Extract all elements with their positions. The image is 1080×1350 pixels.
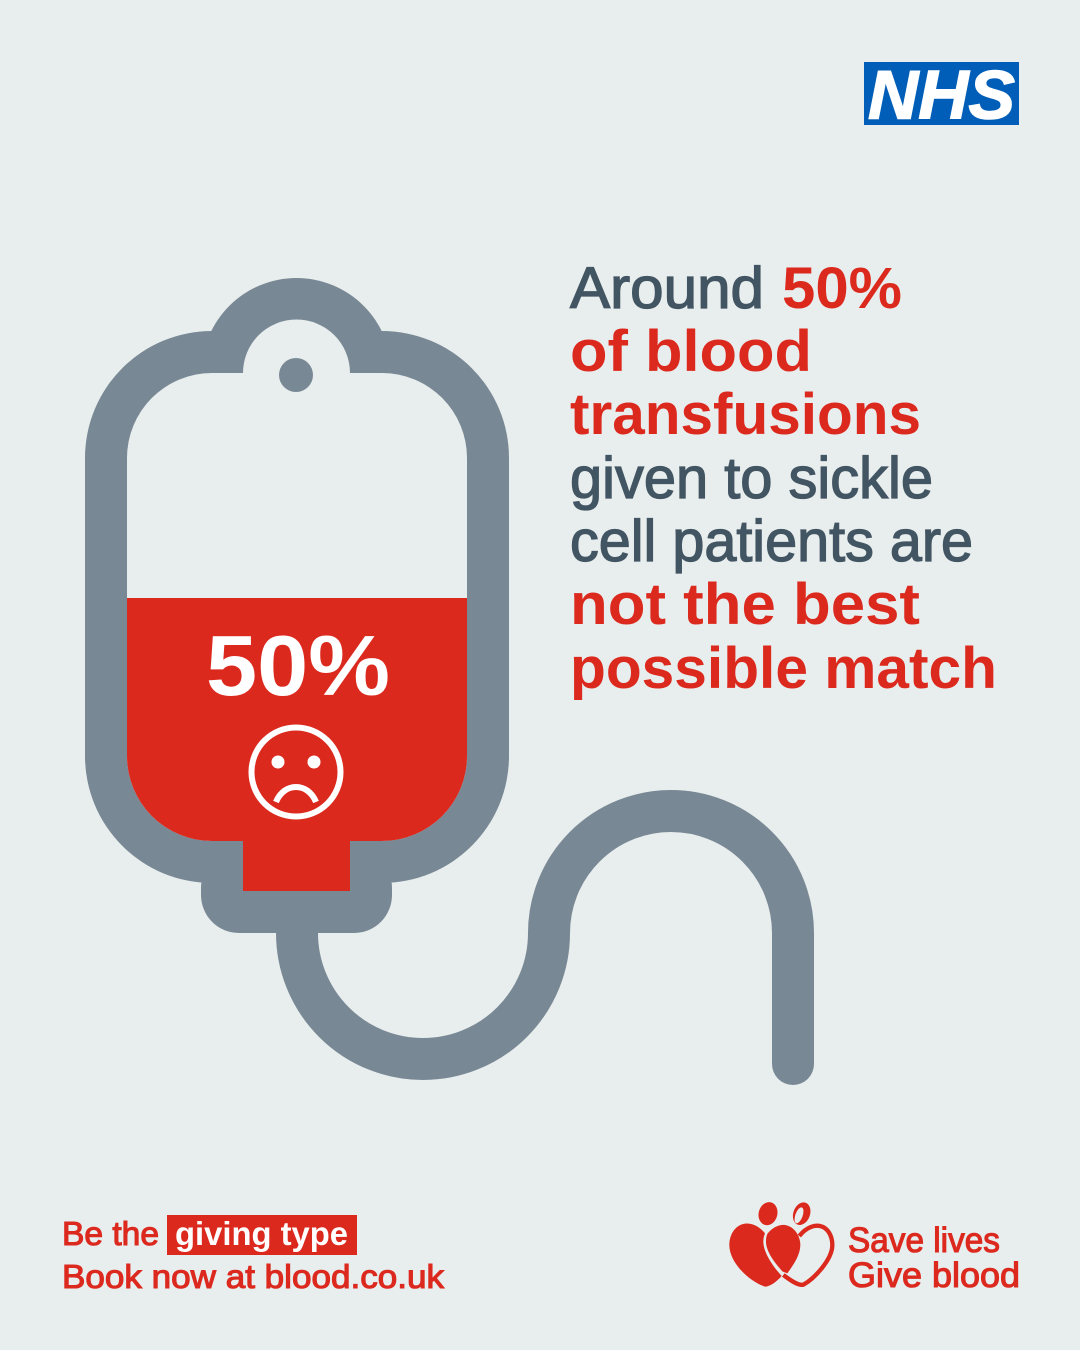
text: Give blood: Give blood	[848, 1256, 1020, 1295]
bag interior	[127, 320, 467, 841]
text: Save lives: Save lives	[848, 1221, 1000, 1260]
line: not the best: not the best	[570, 572, 920, 637]
text: Be the: Be the	[62, 1215, 159, 1252]
blood bag illustration	[85, 278, 793, 1064]
headline statement	[570, 256, 997, 701]
bag bottom collar	[201, 850, 392, 933]
Give Blood logo	[729, 1200, 1020, 1295]
line: transfusions: transfusions	[570, 382, 921, 447]
bag outer shell	[85, 331, 509, 883]
line: Around 50%: Around	[570, 256, 764, 321]
text: Book now at blood.co.uk: Book now at blood.co.uk	[62, 1258, 445, 1295]
blood fill at 50%	[127, 598, 467, 891]
line: Around 50%: 50%	[782, 256, 902, 321]
hanging hole	[279, 358, 313, 392]
icon: sad face	[252, 728, 340, 816]
50% label: 50%	[206, 619, 390, 714]
line: given to sickle: given to sickle	[570, 446, 933, 511]
highlight: giving type: giving type	[175, 1215, 348, 1252]
campaign tagline	[62, 1215, 445, 1295]
tube	[297, 811, 793, 1064]
line: of blood: of blood	[570, 319, 812, 384]
line: possible match: possible match	[570, 636, 997, 701]
icon: two hearts	[729, 1200, 832, 1287]
hanging tab	[202, 278, 392, 468]
NHS logo: NHS	[868, 56, 1015, 134]
line: cell patients are: cell patients are	[570, 509, 973, 574]
